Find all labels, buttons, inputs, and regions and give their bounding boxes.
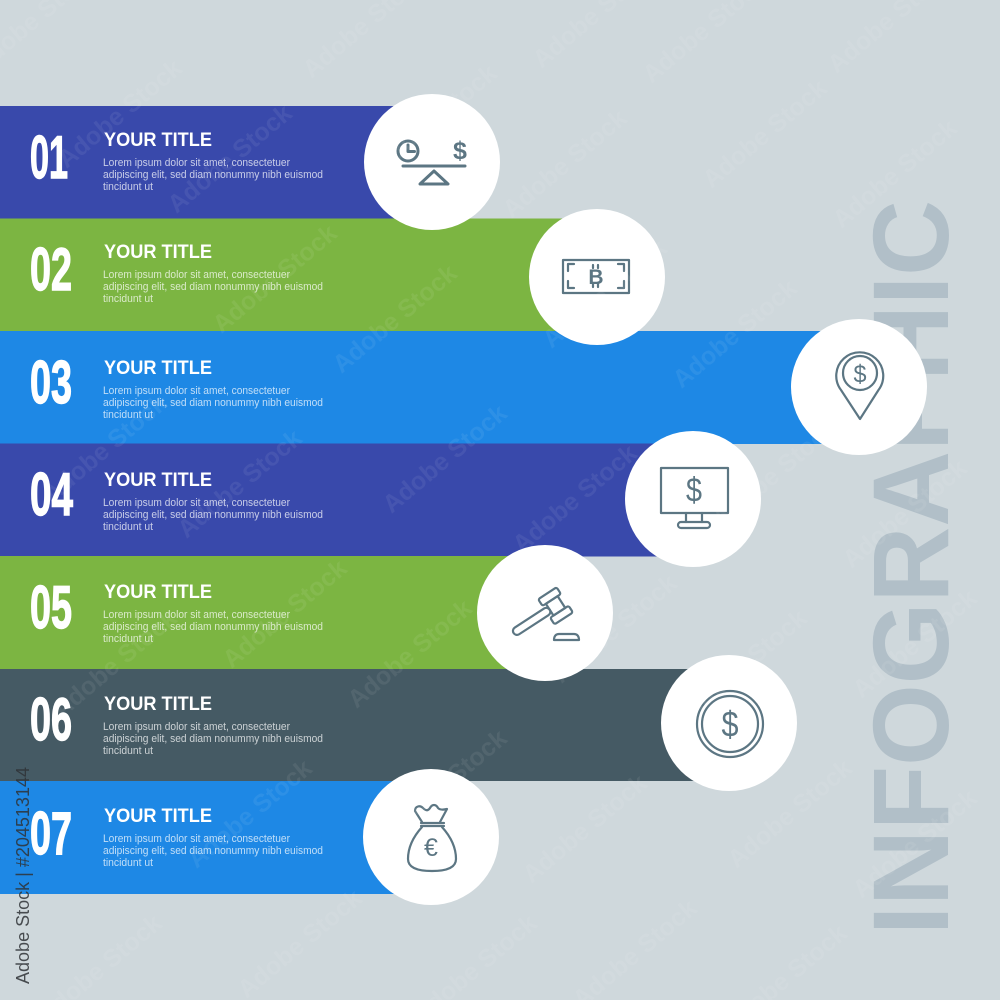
stock watermark pattern: Adobe Stock (367, 59, 502, 179)
row 07: blue band (0, 781, 431, 894)
badge: time versus money scale: $ (453, 137, 467, 165)
stock watermark pattern: Adobe Stock (172, 424, 307, 544)
row 06: slate band: adipiscing elit, sed diam nonummy nibh euismod (103, 733, 323, 745)
stock watermark pattern: Adobe Stock (377, 399, 512, 519)
badge: gavel (477, 545, 613, 681)
row 01: indigo band: Lorem ipsum dolor sit amet, consectetuer (103, 157, 290, 169)
row 04: indigo band: tincidunt ut (103, 521, 153, 533)
row 02: green band: tincidunt ut (103, 293, 153, 305)
stock watermark pattern: Adobe Stock (52, 54, 187, 174)
stock watermark pattern: Adobe Stock (377, 724, 512, 844)
row 04: indigo band: YOUR TITLE (104, 470, 212, 491)
row 07: blue band: Lorem ipsum dolor sit amet, consectetuer (103, 833, 290, 845)
row 01: indigo band: YOUR TITLE (104, 130, 212, 151)
stock watermark pattern: Adobe Stock (217, 554, 352, 674)
badge: dollar coin: $ (722, 704, 738, 744)
badge: bitcoin banknote (529, 209, 665, 345)
row 01: indigo band (0, 106, 432, 219)
row 07: blue band: adipiscing elit, sed diam nonummy nibh euismod (103, 845, 323, 857)
row 01: indigo band: 01 (30, 124, 68, 191)
row 02: green band: Lorem ipsum dolor sit amet, consectetuer (103, 269, 290, 281)
row 03: blue band: Lorem ipsum dolor sit amet, consectetuer (103, 385, 290, 397)
stock watermark pattern: Adobe Stock (677, 604, 812, 724)
stock watermark pattern: Adobe Stock (667, 274, 802, 394)
stock watermark pattern: Adobe Stock (517, 769, 652, 889)
stock watermark pattern: Adobe Stock (497, 104, 632, 224)
row 05: green band (0, 556, 545, 669)
badge: dollar location pin (791, 319, 927, 455)
stock watermark pattern: Adobe Stock (847, 584, 982, 704)
row 06: slate band: Lorem ipsum dolor sit amet, consectetuer (103, 721, 290, 733)
badge: euro money bag: € (424, 834, 438, 862)
badge: euro money bag (363, 769, 499, 905)
stock watermark pattern: Adobe Stock (342, 594, 477, 714)
row 04: indigo band: 04 (30, 461, 73, 528)
row 02: green band: 02 (30, 236, 72, 303)
row 03: blue band (0, 331, 859, 444)
row 01: indigo band: tincidunt ut (103, 181, 153, 193)
row 05: green band: YOUR TITLE (104, 582, 212, 603)
stock watermark pattern: Adobe Stock (837, 454, 972, 574)
row 02: green band: adipiscing elit, sed diam nonummy nibh euismod (103, 281, 323, 293)
stock attribution label: Adobe Stock | #204513144 (13, 767, 33, 984)
badge: bitcoin banknote: B (588, 266, 604, 289)
row 03: blue band: 03 (30, 349, 72, 416)
stock watermark pattern: Adobe Stock (182, 754, 317, 874)
row 02: green band (0, 218, 597, 332)
row 01: indigo band: adipiscing elit, sed diam nonummy nibh euismod (103, 169, 323, 181)
row 02: green band: YOUR TITLE (104, 242, 212, 263)
row 06: slate band: 06 (30, 686, 72, 753)
badge: dollar on monitor (625, 431, 761, 567)
stock watermark pattern: Adobe Stock (722, 754, 857, 874)
row 07: blue band: 07 (30, 800, 72, 867)
row 05: green band: Lorem ipsum dolor sit amet, consectetuer (103, 609, 290, 621)
stock watermark pattern: Adobe Stock (547, 569, 682, 689)
stock watermark pattern: Adobe Stock (37, 389, 172, 509)
row 07: blue band: tincidunt ut (103, 857, 153, 869)
row 03: blue band: adipiscing elit, sed diam nonummy nibh euismod (103, 397, 323, 409)
row 04: indigo band (0, 444, 693, 556)
badge: time versus money scale (364, 94, 500, 230)
row 03: blue band: YOUR TITLE (104, 358, 212, 379)
row 06: slate band: tincidunt ut (103, 745, 153, 757)
stock watermark pattern: Adobe Stock (507, 439, 642, 559)
stock watermark pattern: Adobe Stock (327, 259, 462, 379)
badge: dollar on monitor: $ (686, 472, 702, 510)
stock watermark pattern: Adobe Stock (162, 99, 297, 219)
row 06: slate band: YOUR TITLE (104, 694, 212, 715)
stock watermark pattern: Adobe Stock (207, 219, 342, 339)
row 05: green band: 05 (30, 574, 72, 641)
badge: dollar location pin: $ (854, 360, 867, 388)
row 07: blue band: YOUR TITLE (104, 806, 212, 827)
stock watermark pattern: Adobe Stock (47, 604, 182, 724)
row 04: indigo band: adipiscing elit, sed diam nonummy nibh euismod (103, 509, 323, 521)
row 03: blue band: tincidunt ut (103, 409, 153, 421)
row 05: green band: adipiscing elit, sed diam nonummy nibh euismod (103, 621, 323, 633)
row 04: indigo band: Lorem ipsum dolor sit amet, consectetuer (103, 497, 290, 509)
badge: dollar coin (661, 655, 797, 791)
stock watermark pattern: Adobe Stock (697, 74, 832, 194)
stock watermark pattern: Adobe Stock (537, 234, 672, 354)
stock watermark pattern: Adobe Stock (707, 414, 842, 534)
row 05: green band: tincidunt ut (103, 633, 153, 645)
stock watermark pattern: Adobe Stock (827, 114, 962, 234)
stock watermark pattern: Adobe Stock (847, 784, 982, 904)
row 06: slate band (0, 669, 729, 781)
vertical heading: INFOGRAPHIC (850, 200, 971, 935)
